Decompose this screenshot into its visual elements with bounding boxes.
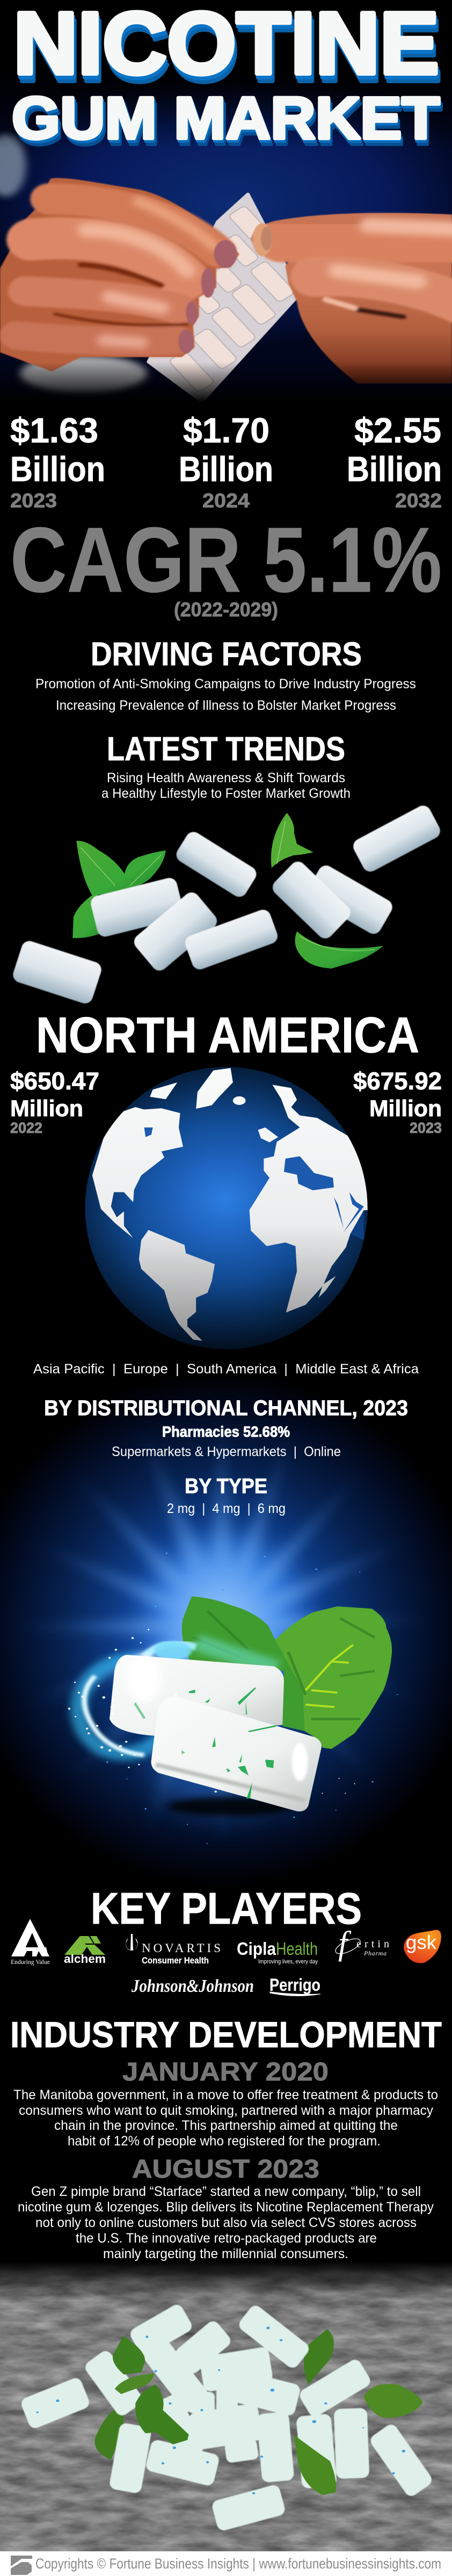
logo: Cipla Health: Improving lives, every day — [258, 1959, 318, 1965]
type values: 2 mg | 4 mg | 6 mg — [167, 1501, 286, 1516]
title — [12, 0, 442, 157]
stat: 2022 North America — [10, 1067, 99, 1136]
development: January 2020 — [13, 2058, 438, 2149]
heading: by distributional channel: BY DISTRIBUTIONAL CHANNEL, 2023 — [44, 1396, 408, 1420]
stat: 2022 North America: $650.47 — [10, 1067, 99, 1095]
logos — [11, 1919, 441, 1996]
logo: Novartis: NOVARTIS — [142, 1941, 221, 1955]
distribution channel values: Pharmacies 52.68% — [162, 1423, 290, 1440]
stat: 2023 North America: Million — [369, 1096, 442, 1122]
title line: GUM MARKET: GUM MARKET — [15, 91, 442, 157]
gum piece: front — [151, 1696, 322, 1811]
development: August 2023: not only to online customers but also via select CVS stores across — [35, 2215, 417, 2230]
logo: GSK — [404, 1930, 441, 1963]
logo: ITC: Enduring Value — [11, 1958, 50, 1966]
stat: 2023 North America — [353, 1067, 442, 1136]
gum piece: back — [110, 1655, 284, 1736]
other regions: Asia Pacific | Europe | South America | Middle East & Africa — [33, 1362, 419, 1377]
development: January 2020: The Manitoba government, in a move to offer free treatment & products to — [13, 2087, 438, 2102]
heading: driving factors: DRIVING FACTORS — [91, 636, 362, 672]
heading: key players: KEY PLAYERS — [91, 1883, 362, 1933]
mint leaves — [72, 813, 383, 969]
distribution channel values: Supermarkets & Hypermarkets | Online — [112, 1444, 341, 1459]
stat: 2032 market size: Billion — [347, 449, 442, 489]
stat: 2023 market size — [10, 411, 105, 512]
footer bar — [0, 2551, 452, 2576]
logo: Cipla Health — [237, 1939, 318, 1965]
stat: 2023 market size: Billion — [10, 449, 105, 489]
stat: 2024 market size — [179, 411, 273, 512]
heading: by type: BY TYPE — [185, 1475, 267, 1498]
logo: alchem — [64, 1936, 106, 1966]
logo: Johnson & Johnson: Johnson&Johnson — [131, 1976, 254, 1996]
stat: 2022 North America: 2022 — [10, 1119, 42, 1136]
stat: 2032 market size: 2032 — [395, 490, 442, 512]
mint leaves — [182, 1596, 392, 1749]
development: January 2020: habit of 12% of people who registered for the program. — [68, 2134, 381, 2149]
stat: 2023 market size: $1.63 — [10, 411, 98, 450]
development: January 2020: JANUARY 2020 — [122, 2058, 329, 2086]
logo: Perrigo: Perrigo — [269, 1975, 320, 1995]
blue speckles — [37, 2327, 405, 2494]
title line: GUM MARKET: GUM MARKET — [13, 88, 440, 154]
hero photo: hands holding blister pack — [0, 72, 452, 407]
stat: 2024 market size: Billion — [179, 449, 273, 489]
stat: 2032 market size: $2.55 — [354, 411, 441, 450]
logo: Cipla Health: Cipla — [237, 1939, 276, 1959]
stat: 2032 market size — [347, 411, 442, 512]
development: August 2023: nicotine gum & lozenges. Blip delivers its Nicotine Replacement Therapy — [18, 2200, 434, 2215]
heading: latest trends: LATEST TRENDS — [107, 731, 345, 768]
stat: 2023 market size: 2023 — [10, 490, 57, 512]
stat: 2023 North America: $675.92 — [353, 1067, 442, 1095]
right hand — [251, 213, 452, 383]
development: August 2023: mainly targeting the millennial consumers. — [103, 2246, 348, 2261]
blue stars — [106, 1553, 398, 1844]
title line: GUM MARKET: GUM MARKET — [12, 85, 440, 151]
driving factors text: Increasing Prevalence of Illness to Bolster Market Progress — [56, 698, 396, 713]
leaves behind gum — [95, 2329, 422, 2460]
driving factors text — [35, 676, 416, 713]
stat: 2024 market size: 2024 — [202, 490, 250, 512]
title line: NICOTINE: NICOTINE — [16, 2, 442, 100]
latest trends text: Rising Health Awareness & Shift Towards — [107, 770, 345, 785]
sparkle dots — [68, 1629, 355, 1794]
leaves over gum — [113, 2336, 336, 2495]
development: August 2023: AUGUST 2023 — [132, 2155, 319, 2184]
illustration: chewing gum pieces and mint leaves — [11, 803, 443, 1006]
stat: 2024 market size: $1.70 — [183, 411, 269, 450]
logo: Cipla Health: Health — [276, 1939, 318, 1959]
logo: Fertin Pharma: f — [338, 1925, 352, 1962]
heading: north america: NORTH AMERICA — [36, 1007, 419, 1063]
logo: alchem: alchem — [64, 1952, 106, 1966]
blister pack — [149, 194, 300, 402]
left hand — [0, 178, 239, 372]
illustration background: blue burst — [0, 1372, 452, 1887]
green speckles — [134, 1687, 277, 1799]
globe — [85, 1067, 375, 1349]
logo: Fertin Pharma: ertin — [356, 1938, 389, 1950]
title line: NICOTINE: NICOTINE — [14, 0, 440, 96]
gum pieces — [19, 2302, 434, 2532]
development: January 2020: consumers who want to quit smoking, partnered with a major pharmacy — [19, 2103, 433, 2118]
development: August 2023: the U.S. The innovative retro-packaged products are — [76, 2231, 377, 2246]
logo: Fertin Pharma: Pharma — [363, 1949, 387, 1957]
driving factors text: Promotion of Anti-Smoking Campaigns to Drive Industry Progress — [35, 676, 416, 692]
bottom photo: gum pieces on grey stone — [0, 2261, 452, 2551]
illustration: nicotine gum with mint leaves and glow — [68, 1553, 398, 1844]
latest trends text — [101, 770, 351, 801]
logo: Novartis — [126, 1934, 221, 1966]
stat: 2023 North America: 2023 — [410, 1119, 442, 1136]
CAGR headline: (2022-2029) — [174, 599, 278, 621]
logo: ITC — [11, 1919, 50, 1966]
shadow under gum — [167, 1797, 294, 1816]
development: August 2023 — [18, 2155, 434, 2261]
distribution channel values — [112, 1423, 341, 1459]
latest trends text: a Healthy Lifestyle to Foster Market Growth — [101, 786, 351, 801]
stat: 2022 North America: Million — [10, 1096, 83, 1122]
gum pieces — [11, 803, 443, 1006]
logo: GSK: gsk — [406, 1931, 437, 1953]
logo: Novartis: Consumer Health — [142, 1955, 209, 1966]
glow swirl — [70, 1641, 277, 1760]
development: August 2023: Gen Z pimple brand “Starface” started a new company, “blip,” to sell — [31, 2184, 421, 2199]
logo: Fertin Pharma — [333, 1925, 389, 1962]
development: January 2020: chain in the province. This partnership aimed at quitting the — [54, 2118, 398, 2133]
footer logo — [11, 2556, 32, 2575]
